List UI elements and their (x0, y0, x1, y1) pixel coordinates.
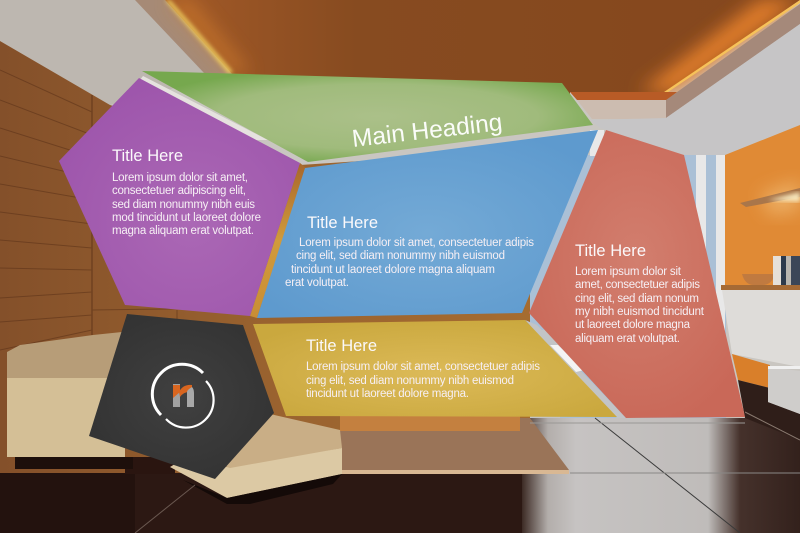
red body text: cing elit, sed diam nonum (575, 293, 699, 305)
panel: yellow (253, 320, 617, 417)
blue body text (285, 237, 534, 289)
purple body text: Lorem ipsum dolor sit amet, (112, 172, 248, 184)
red title: Title Here (575, 242, 646, 260)
blue title: Title Here (307, 214, 378, 232)
blue body text: tincidunt ut laoreet dolore magna aliquam (291, 264, 495, 276)
yellow body text: cing elit, sed diam nonummy nibh euismod (306, 375, 514, 387)
yellow title: Title Here (306, 337, 377, 355)
blue body text: Lorem ipsum dolor sit amet, consectetuer adipis (299, 237, 534, 249)
purple body text: sed diam nonummy nibh euis (112, 199, 255, 211)
yellow body text: Lorem ipsum dolor sit amet, consectetuer adipis (306, 361, 540, 373)
panel: blue (257, 130, 598, 318)
purple body text: magna aliquam erat volutpat. (112, 225, 254, 237)
red body text: Lorem ipsum dolor sit (575, 266, 682, 278)
purple body text: mod tincidunt ut laoreet dolore (112, 212, 261, 224)
purple body text: consectetuer adipiscing elit, (112, 185, 246, 197)
purple body text (112, 172, 261, 237)
heading: Main Heading: Main Heading (351, 109, 504, 153)
panel: green heading banner (142, 71, 593, 162)
panel: purple (59, 78, 300, 316)
red body text: ut laoreet dolore magna (575, 319, 691, 331)
panel: red (529, 130, 745, 418)
blue body text: cing elit, sed diam nonummy nibh euismod (296, 250, 505, 262)
icon: n logo (152, 364, 214, 428)
blue body text: erat volutpat. (285, 277, 349, 289)
panel: dark logo pentagon (89, 314, 274, 479)
purple title: Title Here (112, 147, 183, 165)
red body text: my nibh euismod tincidunt (575, 306, 705, 318)
red body text: amet, consectetuer adipis (575, 279, 700, 291)
yellow body text (306, 361, 540, 400)
yellow body text: tincidunt ut laoreet dolore magna. (306, 388, 469, 400)
red body text (575, 266, 705, 345)
red body text: aliquam erat volutpat. (575, 333, 680, 345)
